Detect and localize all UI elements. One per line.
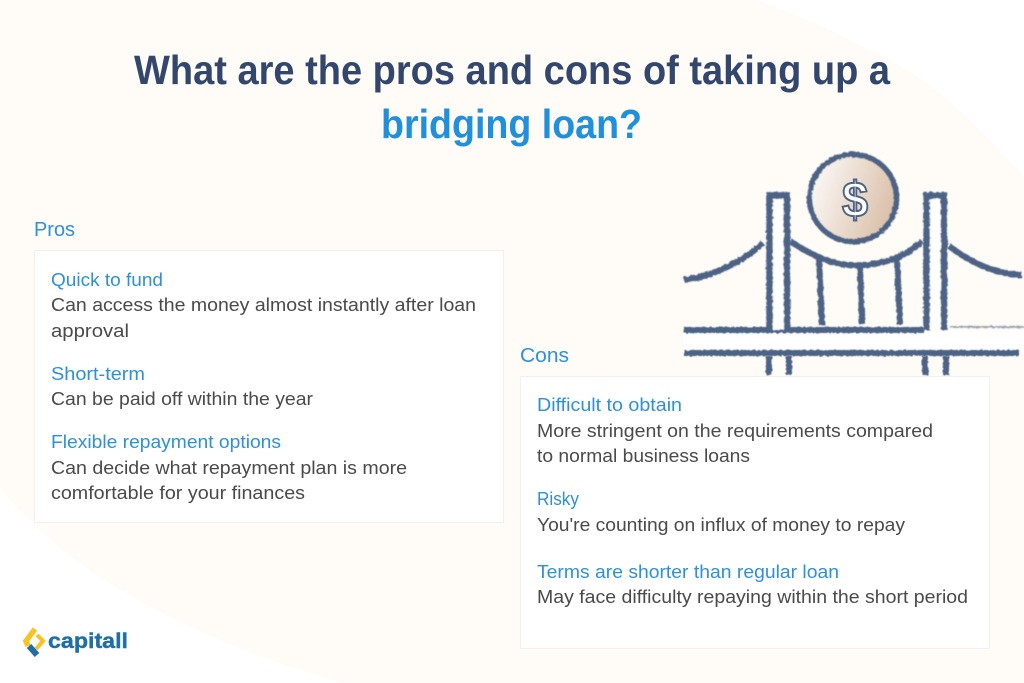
- illustration: bridge with dollar coin: [683, 154, 1024, 375]
- dollar coin: $: [842, 172, 868, 228]
- title: [134, 47, 891, 147]
- pros heading: Pros: [34, 219, 75, 241]
- cons heading: Cons: [520, 345, 569, 367]
- con: difficult to obtain: Difficult to obtain: [537, 394, 682, 415]
- title: bridging loan?: [381, 101, 642, 147]
- con: risky: You're counting on influx of money to repay: [537, 514, 906, 535]
- con: risky: [537, 488, 906, 535]
- pro: quick to fund: [51, 269, 476, 341]
- con: terms are shorter: Terms are shorter than regular loan: [537, 561, 839, 582]
- con: difficult to obtain: to normal business loans: [537, 445, 750, 466]
- bridge deck: [683, 326, 1024, 356]
- dollar coin: [810, 154, 896, 242]
- pro: quick to fund: approval: [51, 320, 129, 341]
- logo: capitall: [26, 629, 128, 655]
- con: risky: Risky: [537, 488, 580, 509]
- pro: short-term: [51, 363, 313, 409]
- title: What are the pros and cons of taking up a: [134, 47, 891, 93]
- con: difficult to obtain: More stringent on the requirements compared: [537, 420, 933, 441]
- con: terms are shorter: May face difficulty repaying within the short period: [537, 586, 968, 607]
- bridge towers: [769, 196, 946, 375]
- pro: flexible repayment options: [51, 431, 407, 503]
- pro: quick to fund: Can access the money almost instantly after loan: [51, 294, 476, 315]
- pro: flexible repayment options: Flexible repayment options: [51, 431, 281, 452]
- logo: capitall: capitall: [48, 630, 128, 653]
- pro: short-term: Can be paid off within the year: [51, 388, 313, 409]
- con: terms are shorter: [537, 561, 968, 607]
- con: difficult to obtain: [537, 394, 933, 466]
- suspension cables and hangers: [684, 241, 1022, 325]
- panel: pros: [34, 250, 504, 522]
- pro: flexible repayment options: comfortable for your finances: [51, 482, 305, 503]
- pro: quick to fund: Quick to fund: [51, 269, 163, 290]
- pro: short-term: Short-term: [51, 363, 145, 384]
- logo icon: [26, 629, 43, 655]
- panel: cons: [520, 376, 990, 648]
- pro: flexible repayment options: Can decide what repayment plan is more: [51, 457, 407, 478]
